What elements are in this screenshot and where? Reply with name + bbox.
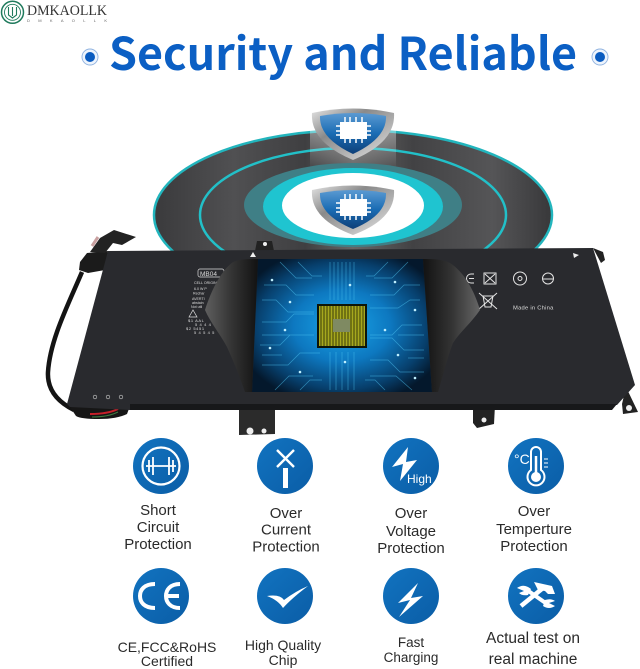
- battery label: left text: 5 4 5 4 5: [194, 330, 215, 335]
- brand logo: DMKAOLLK: [27, 3, 107, 19]
- text: short circuit protection: Circuit: [137, 519, 180, 536]
- icon: over current: [257, 438, 313, 494]
- text: short circuit protection: Short: [140, 502, 177, 519]
- text: over temperature protection: Protection: [500, 538, 568, 555]
- icon: short circuit: [133, 438, 189, 494]
- text: over temperature protection: Temperture: [496, 521, 572, 538]
- icon: over voltage: [383, 438, 439, 494]
- text: actual test: [486, 630, 580, 668]
- brand logo: DMKAOLLK: [27, 18, 107, 23]
- peeled label flaps: [205, 259, 480, 392]
- text: over voltage protection: Protection: [377, 540, 445, 557]
- battery label: left text: 6.0 W P: [194, 287, 207, 291]
- battery label: left text: abstain: [192, 301, 204, 305]
- text: short circuit protection: [124, 502, 192, 553]
- text: over current protection: Over: [270, 505, 302, 522]
- text: over voltage protection: Voltage: [386, 523, 436, 540]
- icon: check mark: [257, 568, 313, 624]
- circuit board window: [252, 259, 432, 392]
- battery label: left text: Not util: [191, 305, 202, 309]
- battery label: left text: 5 4 4 4: [195, 322, 212, 327]
- icon: over temperature: °C: [514, 451, 530, 467]
- text: certification: CE,FCC&RoHS: [118, 639, 216, 655]
- battery label: right symbols: Made in China: [513, 306, 554, 312]
- battery label: left text: $2 5451: [186, 326, 205, 331]
- text: over temperature protection: [496, 503, 572, 555]
- processor chip: [317, 304, 367, 348]
- battery label: left text: MB04: [200, 271, 217, 278]
- icon: tools: [508, 568, 564, 624]
- battery label: right symbols: [466, 272, 554, 312]
- text: high quality chip: High Quality: [245, 637, 321, 653]
- icon: CE mark: [133, 568, 189, 624]
- battery cable: [48, 230, 136, 419]
- text: certification: Certified: [141, 653, 193, 669]
- text: over voltage protection: Over: [395, 505, 427, 522]
- icon: over temperature: [508, 438, 564, 494]
- battery label: left text: Rechar: [193, 292, 205, 296]
- battery label: left text: [93, 269, 224, 399]
- battery label: left text: $1 AAL: [188, 318, 205, 323]
- battery label: left text: AVERTI: [192, 297, 205, 301]
- concentric security rings: [154, 128, 552, 300]
- text: actual test: real machine: [489, 651, 577, 668]
- brand logo: [2, 1, 107, 23]
- text: over current protection: Current: [261, 522, 312, 538]
- icon: over voltage: High: [407, 472, 432, 486]
- title: Security and Reliable: [109, 18, 577, 83]
- battery body: [67, 248, 635, 410]
- text: over temperature protection: Over: [518, 503, 550, 520]
- text: actual test: Actual test on: [486, 630, 580, 647]
- battery mounting tabs: [239, 241, 638, 435]
- text: over current protection: [252, 505, 320, 556]
- icon: upper shield: [312, 108, 394, 160]
- battery label: left text: CELL ORIGIN: [194, 281, 217, 285]
- text: short circuit protection: Protection: [124, 536, 192, 553]
- text: over voltage protection: [377, 505, 445, 557]
- text: over current protection: Protection: [252, 538, 320, 556]
- text: high quality chip: Chip: [269, 652, 298, 668]
- text: fast charging: Fast: [398, 635, 424, 650]
- text: fast charging: Charging: [384, 650, 438, 665]
- icon: lower shield: [312, 186, 394, 235]
- text: high quality chip: [245, 637, 321, 668]
- text: certification: [118, 639, 216, 669]
- text: fast charging: [384, 635, 438, 665]
- icon: fast charging: [383, 568, 439, 624]
